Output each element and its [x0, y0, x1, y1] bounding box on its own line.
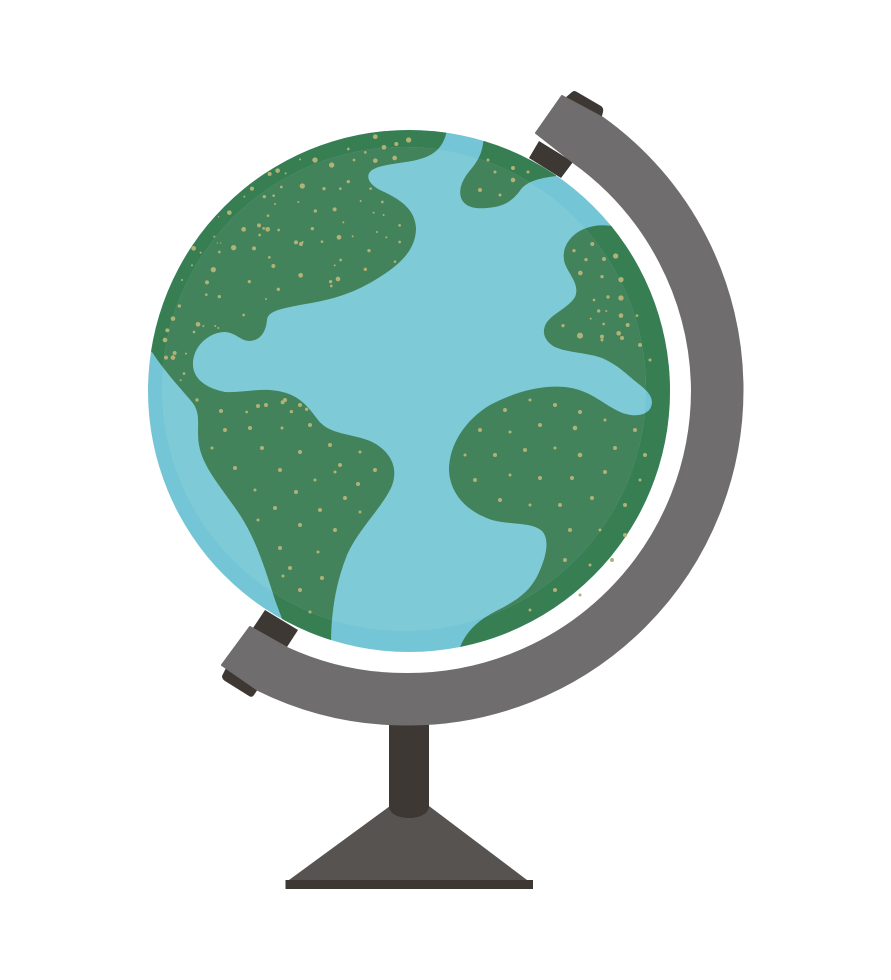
axis peg: bottom [253, 610, 298, 647]
illustration: desk globe [148, 91, 744, 889]
axis nub: bottom [222, 668, 258, 697]
stand arm [222, 96, 743, 725]
inner shading [162, 147, 646, 631]
speckles: northeast island [478, 158, 530, 196]
axis peg: top [529, 141, 573, 178]
globe [148, 130, 670, 652]
axis nub: top [565, 91, 603, 120]
speckles: eastern continent [561, 242, 638, 339]
base plate [286, 880, 533, 889]
ocean [148, 130, 670, 652]
speckles: northwest continent [163, 134, 411, 413]
stem [389, 715, 429, 818]
continents [163, 147, 646, 620]
base foot [289, 806, 527, 880]
pole [286, 715, 533, 889]
speckles: southern continent [210, 398, 377, 614]
